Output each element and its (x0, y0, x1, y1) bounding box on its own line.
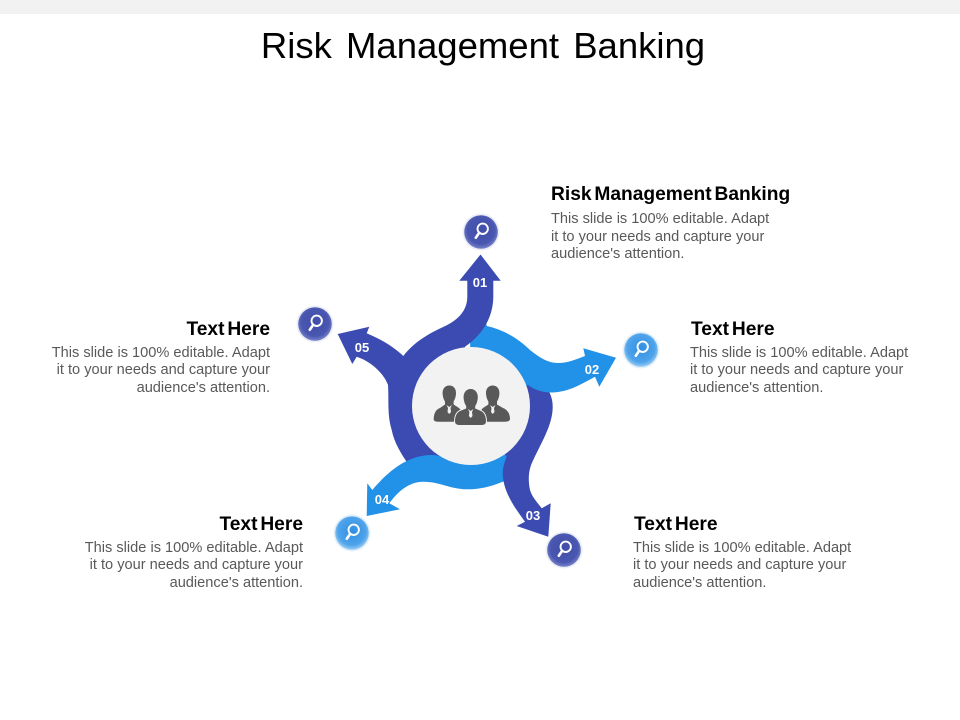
text block: step 03: Text Here (634, 514, 718, 535)
icon: magnifier 02 (622, 332, 660, 368)
text block: step 04 (85, 514, 303, 590)
text block: step 05: audience's attention. (137, 380, 270, 396)
icon: magnifier 01 (462, 214, 500, 250)
text block: step 01: audience's attention. (551, 246, 684, 262)
text block: step 02: This slide is 100% editable. Adapt (690, 344, 908, 360)
text block: step 05: This slide is 100% editable. Adapt (52, 344, 270, 360)
text block: step 03: it to your needs and capture your (633, 557, 846, 573)
icon: magnifier 04 (334, 514, 370, 552)
arrow 03 (471, 380, 553, 537)
arrow 05 (338, 327, 471, 470)
icon: magnifier 03 (546, 532, 582, 568)
label 02: 02 (585, 362, 599, 377)
label 01: 01 (473, 275, 487, 290)
text block: step 05: it to your needs and capture your (57, 362, 270, 378)
text block: step 01 (551, 184, 790, 262)
label 04: 04 (375, 492, 390, 507)
text block: step 04: audience's attention. (170, 574, 303, 590)
text block: step 01: This slide is 100% editable. Adapt (551, 211, 769, 227)
text block: step 02: Text Here (691, 319, 775, 340)
text block: step 03: audience's attention. (633, 574, 766, 590)
arrow 01 (400, 254, 501, 406)
text block: step 02: it to your needs and capture your (690, 362, 903, 378)
text block: step 05 (52, 319, 270, 396)
text block: step 05: Text Here (186, 319, 270, 340)
title: Risk Management Banking (261, 25, 705, 66)
icon: business people (434, 386, 510, 425)
text block: step 03 (633, 514, 852, 590)
text block: step 04: it to your needs and capture your (90, 557, 303, 573)
label 03: 03 (526, 508, 540, 523)
text block: step 04: Text Here (219, 514, 303, 535)
text block: step 02: audience's attention. (690, 380, 823, 396)
label 05: 05 (355, 340, 369, 355)
icon: magnifier 05 (296, 306, 334, 342)
text block: step 01: Risk Management Banking (551, 184, 790, 205)
text block: step 03: This slide is 100% editable. Adapt (633, 540, 851, 556)
text block: step 01: it to your needs and capture your (551, 228, 764, 244)
arrow 02 (470, 322, 616, 406)
centre circle (412, 347, 530, 465)
text block: step 04: This slide is 100% editable. Adapt (85, 540, 303, 556)
text block: step 02 (690, 319, 908, 396)
arrow 04 (367, 420, 515, 516)
